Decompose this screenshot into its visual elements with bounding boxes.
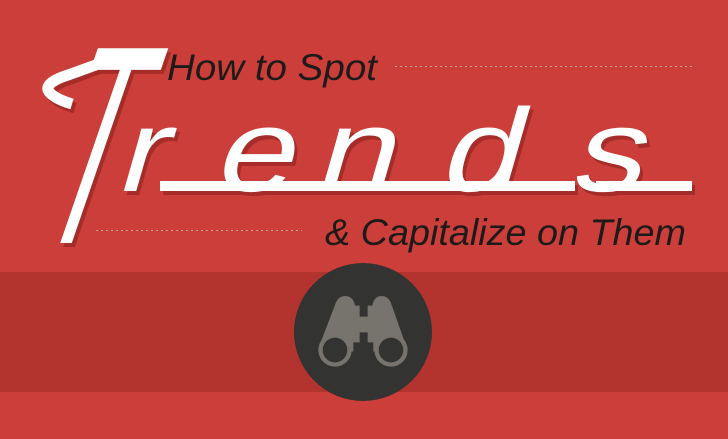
- subtitle: How to Spot: How to Spot: [167, 47, 379, 88]
- icon: binoculars badge: [294, 263, 432, 401]
- title: Trends: [7, 0, 692, 303]
- subtitle: Capitalize on Them: & Capitalize on Them: [325, 212, 686, 253]
- band: [0, 272, 728, 392]
- icon: binoculars: [318, 296, 408, 367]
- title: Trends: rends: [107, 85, 670, 217]
